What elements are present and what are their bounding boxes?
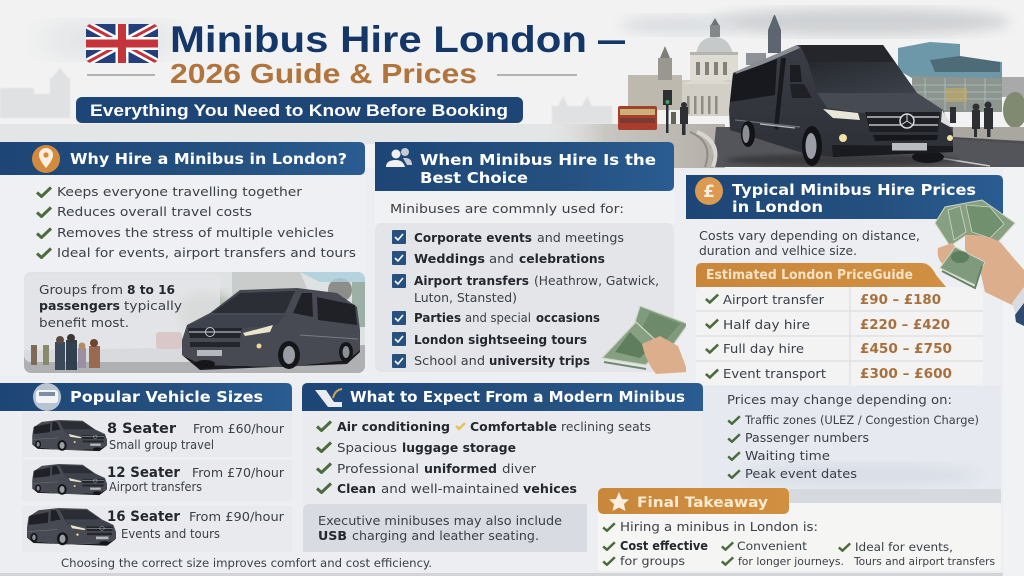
photo: group and minibus [24,272,365,373]
heading [686,175,1003,219]
heading: Why Hire a Minibus in London? [70,150,347,168]
box: passenger note: Groups from [39,282,123,297]
table row [706,317,950,333]
list: reasons: Reduces overall travel costs [57,204,252,219]
benefit: ideal for events [839,540,995,568]
list: features: and well-maintained [381,481,519,496]
heading [598,488,789,514]
intro text [699,228,920,258]
intro text: Costs vary depending on distance, [699,228,920,243]
list box: uses: celebrations [519,251,605,266]
table row: Airport transfer [723,292,825,307]
table heading: Estimated London PriceGuide [706,268,913,283]
heading: When Minibus Hire Is the [420,151,656,169]
box: passenger note [24,284,220,362]
heading: Popular Vehicle Sizes [70,388,263,406]
heading: Typical Minibus Hire Prices [732,181,976,199]
title: Minibus Hire London [170,19,587,60]
box: passenger note: passengers [39,298,120,313]
list: reasons: Ideal for events, airport transfers and tours [57,245,356,260]
list: price factors: Waiting time [745,448,830,463]
row: 8 seater: Small group travel [109,437,214,452]
list: features: diver [502,461,537,476]
note box: charging and leather seating. [352,528,539,543]
panel: typical prices [686,175,1024,490]
benefit: ideal for events: Tours and airport transfers [853,555,995,568]
icon: pound coin [695,177,723,205]
St Paul's cathedral [628,15,781,116]
list: features: Spacious [337,440,397,455]
list: features: luggage storage [402,440,516,455]
title [87,19,625,89]
list box: uses: and meetings [537,230,624,245]
benefit: convenient: Convenient [737,539,808,553]
table row: Half day hire [723,317,810,332]
heading: Final Takeaway [637,495,769,511]
row: 8 seater: 8 Seater [107,421,176,437]
benefit: cost effective: Cost effective [620,539,708,553]
list: features: vehices [523,481,577,496]
table row: £220 – £420 [860,317,950,333]
list: price factors: Traffic zones (ULEZ / Congestion Charge) [744,413,979,427]
heading: What to Expect From a Modern Minibus [350,388,685,406]
row: 8 seater: From £60/hour [193,421,285,436]
list: features: uniformed [424,461,497,476]
list box: uses: Corporate events [414,230,532,245]
list box: uses: Luton, Stansted) [414,290,517,305]
list box: uses: university trips [489,353,590,368]
benefit: ideal for events: Ideal for events, [855,540,953,554]
tagline pill [76,97,523,123]
row: 12 seater [22,460,292,501]
list: price factors: Peak event dates [745,466,857,481]
icon: hand with money [602,306,688,374]
list: reasons [37,184,356,260]
panel: final takeaway [598,488,1001,571]
row: 12 seater: From £70/hour [192,465,285,480]
table row [706,341,952,357]
table row [706,292,941,308]
text: lead: Hiring a minibus in London is: [620,519,818,534]
flag icon [86,24,158,63]
panel: why hire [0,142,365,375]
glass buildings [898,42,1024,128]
hero minibus [726,45,958,166]
benefit: convenient: for longer journeys. [738,555,844,568]
benefit: cost effective [603,539,708,568]
list: features: Professional [337,461,419,476]
row: 16 seater [22,506,292,552]
list box: uses: Parties [414,310,461,325]
note box: USB [318,528,347,543]
icon: bus [33,383,61,411]
list: reasons: Removes the stress of multiple vehicles [57,225,334,240]
row: 16 seater: 16 Seater [107,509,180,525]
row: 12 seater: Airport transfers [109,479,202,494]
footnote: Choosing the correct size improves comfort and cost efficiency. [61,556,432,570]
table row: Event transport [723,366,826,381]
price table [696,263,983,385]
list box: uses: and special [465,310,531,325]
panel: when minibus hire [375,142,688,374]
list box: uses: occasions [536,310,600,325]
list box: uses: London sightseeing tours [414,332,587,347]
intro text: Minibuses are commnly used for: [390,201,624,216]
icon: people [386,148,412,167]
traffic light and pedestrians [663,90,993,137]
list: features: Clean [337,481,376,496]
list: price factors [727,392,979,481]
list: features: Air conditioning [337,419,450,434]
heading [0,383,292,411]
row: 16 seater: From £90/hour [189,509,285,524]
benefit: convenient [722,539,844,568]
list box: uses: School and [414,353,485,368]
icon: pound coin: £ [703,182,715,202]
box: passenger note: 8 to 16 [127,282,175,297]
table row: £450 – £750 [860,341,952,357]
panel: what to expect [302,383,703,552]
note box: Executive minibuses may also include [318,513,562,528]
icon: minibus [182,288,360,370]
road [712,127,1024,167]
note box [303,504,587,552]
hero photo: London skyline and road [0,15,1024,168]
list: reasons: Keeps everyone travelling together [57,184,303,199]
box: passenger note: benefit most. [39,315,129,330]
list box: uses [375,223,674,372]
icon: hand with cash [935,200,1024,326]
red bus [618,106,657,130]
table heading [696,263,946,287]
tagline pill: Everything You Need to Know Before Booking [90,101,508,120]
benefit: cost effective: for groups [620,554,685,568]
heading: in London [732,198,823,216]
title: — [598,19,625,60]
list: features: Comfortable [470,419,557,434]
icon: seat [315,389,342,407]
list: price factors: Passenger numbers [745,430,869,445]
box: passenger note: typically [124,298,183,313]
table row: £300 – £600 [860,366,952,382]
panel: popular vehicle sizes [0,383,432,570]
row: 12 seater: 12 Seater [107,465,180,481]
table row: Full day hire [723,341,804,356]
list: features: reclining seats [561,419,651,434]
list box: uses: (Heathrow, Gatwick, [534,273,659,288]
pavement [540,124,725,168]
icon: star [609,492,629,511]
list box: uses: and [489,251,514,266]
icon: people group [31,334,100,370]
row: 16 seater: Events and tours [121,526,220,541]
heading [375,142,674,191]
intro text: duration and velhice size. [699,243,857,258]
faded left skyline [0,68,612,124]
heading: Best Choice [420,169,528,187]
row: 8 seater [22,412,292,457]
list box: uses: Weddings [414,251,485,266]
list: price factors: Prices may change depending on: [727,392,952,407]
subtitle: 2026 Guide & Prices [170,58,477,89]
table row [706,366,952,382]
list box: uses: Airport transfers [414,273,529,288]
heading [302,383,703,411]
heading [0,142,365,175]
list: features [317,419,651,496]
table row: £90 – £180 [860,292,941,308]
